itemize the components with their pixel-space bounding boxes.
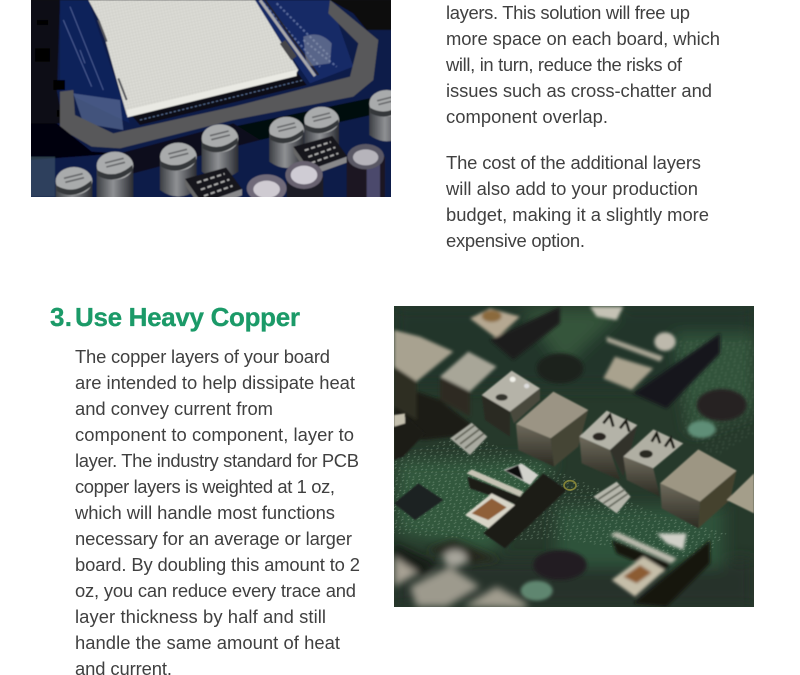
body text: heavy copper paragraph: and convey current from — [75, 398, 273, 419]
black chip — [394, 483, 443, 520]
left black connector — [394, 417, 425, 460]
body text: heavy copper paragraph: layer. The industry standard for PCB — [75, 450, 359, 471]
photo: CPU socket on blue motherboard — [31, 0, 391, 197]
body text: heavy copper paragraph: which will handle most functions — [74, 502, 335, 523]
blurred lower components — [521, 532, 710, 607]
central connectors — [394, 371, 754, 548]
dark large capacitors — [247, 144, 385, 202]
capacitors — [368, 89, 391, 142]
lower dark bands — [31, 122, 108, 160]
small heatsink fins — [450, 423, 487, 455]
usb 2 — [623, 429, 683, 468]
body text: heavy copper paragraph: layer thickness by half and still — [75, 606, 326, 627]
ribbon connector — [467, 469, 523, 497]
body text: cost paragraph — [445, 152, 709, 251]
photo: green circuit board with connectors — [394, 306, 754, 608]
pin header — [483, 473, 567, 548]
body text: heavy copper paragraph: oz, you can reduce every trace and — [75, 580, 356, 601]
body text: heavy copper paragraph: handle the same amount of heat — [75, 632, 340, 653]
body text: layers paragraph: more space on each board, which — [446, 28, 720, 49]
body text: heavy copper paragraph: board. By doubling this amount to 2 — [75, 554, 360, 575]
body text: cost paragraph: The cost of the additional layers — [446, 152, 701, 173]
white socket — [88, 0, 298, 115]
body text: cost paragraph: will also add to your production — [445, 178, 698, 199]
circuit speckle — [30, 157, 55, 197]
copper chip — [465, 493, 515, 528]
body text: layers paragraph — [445, 2, 720, 127]
board speckle — [394, 433, 727, 560]
heatsink block 1 — [516, 392, 588, 438]
socket shadow rail — [128, 72, 307, 125]
heatsink block 2 — [660, 449, 737, 502]
body text: heavy copper paragraph — [74, 346, 360, 675]
heading: 3. Use Heavy Copper: Use Heavy Copper — [75, 302, 300, 332]
gasket band — [60, 0, 378, 148]
body text: cost paragraph: expensive option. — [446, 230, 585, 251]
blurred top components — [394, 307, 747, 440]
body text: heavy copper paragraph: copper layers is weighted at 1 oz, — [75, 476, 335, 497]
chips — [185, 167, 243, 197]
body text: heavy copper paragraph: The copper layers of your board — [75, 346, 330, 367]
blue board — [30, 0, 393, 200]
body text: heavy copper paragraph: component to component, layer to — [75, 424, 354, 445]
body text: layers paragraph: component overlap. — [446, 106, 608, 127]
heading: 3. Use Heavy Copper: 3. — [50, 302, 72, 332]
blurred board tone — [394, 307, 754, 607]
body text: cost paragraph: budget, making it a slightly more — [446, 204, 709, 225]
dark retention frame left — [31, 0, 60, 124]
usb 1 — [579, 411, 637, 450]
body text: layers paragraph: issues such as cross-chatter and — [446, 80, 712, 101]
body text: heavy copper paragraph: necessary for an average or larger — [75, 528, 352, 549]
body text: heavy copper paragraph: are intended to help dissipate heat — [75, 372, 355, 393]
body text: layers paragraph: layers. This solution will free up — [446, 2, 690, 23]
body text: layers paragraph: will, in turn, reduce the risks of — [445, 54, 683, 75]
